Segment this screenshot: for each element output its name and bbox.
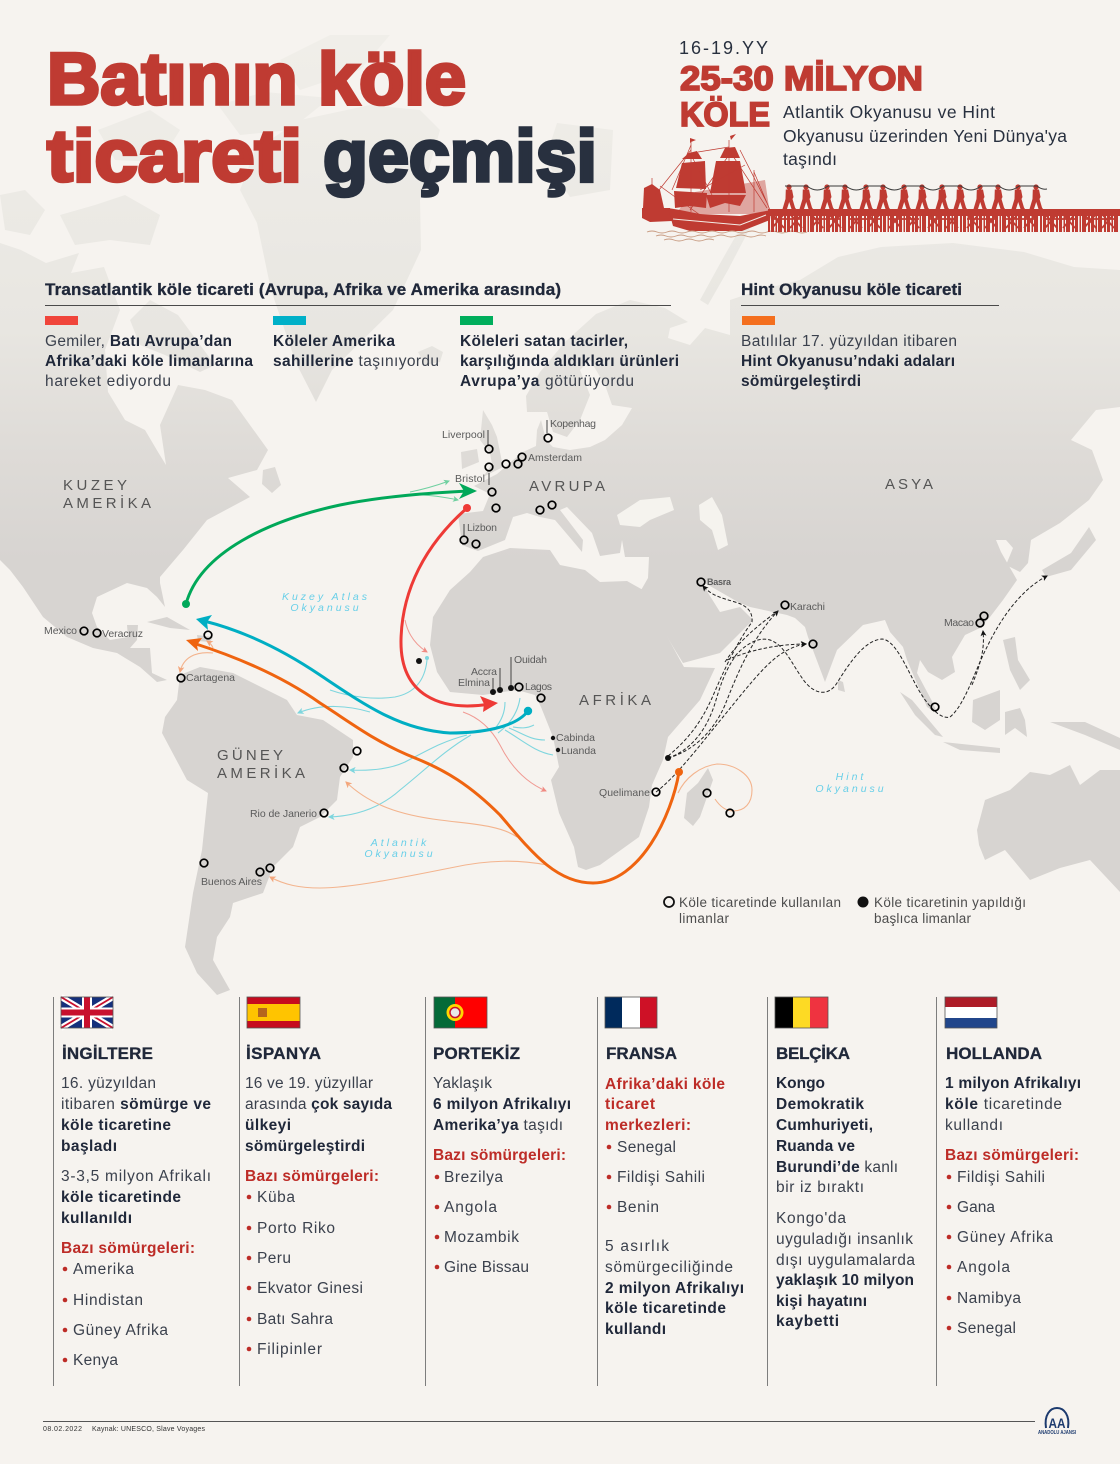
logo: Anadolu Ajansı: AA <box>1048 1415 1066 1431</box>
panel: England: 3-3,5 milyon Afrikalı <box>61 1168 211 1185</box>
panel: Belgium: Kongo'da <box>776 1210 846 1227</box>
route: teal Africa to Americas <box>196 615 532 733</box>
column dividers <box>53 997 937 1386</box>
panel: Netherlands <box>945 997 1081 1337</box>
port names: Amsterdam <box>528 452 582 464</box>
panel: England: başladı <box>61 1138 117 1155</box>
panel: Netherlands: Gana <box>957 1199 995 1216</box>
port names: Lizbon <box>467 522 497 534</box>
thin pink routes <box>405 620 546 791</box>
panel: Netherlands: kullandı <box>945 1117 1003 1134</box>
summary: enslaved people count <box>679 38 1067 169</box>
panel: England: Amerika <box>73 1261 134 1278</box>
panel: Netherlands: Fildişi Sahili <box>957 1169 1045 1186</box>
illustration: sea waves <box>647 231 807 241</box>
continent labels: AFRİKA <box>579 691 651 709</box>
section heading: transatlantic trade: Transatlantik köle ticareti (Avrupa, Afrika ve Amerika arasında) <box>45 280 561 299</box>
logo: Anadolu Ajansı: ANADOLU AJANSI <box>1038 1430 1077 1436</box>
illustration: slave ship <box>642 134 771 231</box>
panel: England: köle ticaretinde <box>61 1189 181 1206</box>
panel: France: Benin <box>617 1199 659 1216</box>
flag: Spain <box>247 997 300 1028</box>
summary: enslaved people count: KÖLE <box>680 96 770 134</box>
title: geçmişi <box>323 116 597 197</box>
panel: Netherlands: köle ticaretinde <box>945 1096 1062 1113</box>
panel: Spain: sömürgeleştirdi <box>245 1138 365 1155</box>
flag: France <box>605 997 657 1028</box>
title: ticareti <box>47 116 302 197</box>
panel: Spain <box>245 997 392 1358</box>
panel: Spain: Porto Riko <box>257 1220 335 1237</box>
panel: Netherlands: Angola <box>957 1259 1010 1276</box>
port names: Veracruz <box>102 628 143 640</box>
title: Batının köle <box>47 39 466 120</box>
panel: Spain: Peru <box>257 1250 291 1267</box>
port names: Mexico <box>44 625 77 637</box>
panel: France: Afrika’daki köle <box>605 1076 725 1093</box>
main port markers <box>416 658 671 761</box>
panel: Netherlands: Güney Afrika <box>957 1229 1053 1246</box>
legend: green route <box>460 316 679 390</box>
panel: France: Senegal <box>617 1139 676 1156</box>
map legend <box>664 895 1026 926</box>
thin orange routes <box>180 641 752 888</box>
panel: Belgium: Demokratik <box>776 1096 864 1113</box>
panel: England: kullanıldı <box>61 1210 132 1227</box>
summary: enslaved people count: 16-19.YY <box>679 38 768 58</box>
panel: France: sömürgeciliğinde <box>605 1259 733 1276</box>
panel: Spain: Batı Sahra <box>257 1311 333 1328</box>
panel: Portugal: Mozambik <box>444 1229 519 1246</box>
legend: orange route <box>741 316 957 390</box>
continent labels <box>63 476 933 782</box>
panel: Belgium: kişi hayatını <box>776 1293 867 1310</box>
map legend: Köle ticaretinde kullanılan <box>679 895 841 910</box>
panel: Belgium: yaklaşık 10 milyon <box>776 1272 914 1289</box>
panel: England: 16. yüzyıldan <box>61 1075 156 1092</box>
legend: green route: Avrupa’ya götürüyordu <box>460 373 634 390</box>
panel: Netherlands: Namibya <box>957 1290 1021 1307</box>
panel: Netherlands: Senegal <box>957 1320 1016 1337</box>
port names: Buenos Aires <box>201 876 262 888</box>
continent labels: ASYA <box>885 476 933 493</box>
thin teal routes <box>298 656 553 817</box>
panel: Portugal: PORTEKİZ <box>433 1044 520 1063</box>
panel: Netherlands: HOLLANDA <box>946 1044 1042 1063</box>
legend: orange route: Hint Okyanusu’ndaki adaları <box>741 353 955 370</box>
port names: Ouidah <box>514 654 547 666</box>
summary: enslaved people count: 25-30 MİLYON <box>680 60 923 98</box>
legend: green route: Köleleri satan tacirler, <box>460 333 628 350</box>
panel: England: İNGİLTERE <box>62 1044 153 1063</box>
panel: Spain: Küba <box>257 1189 295 1206</box>
ocean labels: Okyanusu <box>815 783 887 795</box>
panel: France: 2 milyon Afrikalıyı <box>605 1280 744 1297</box>
panel: Spain: ülkeyi <box>245 1117 291 1134</box>
port label leader lines <box>464 420 547 690</box>
panel: England: Bazı sömürgeleri: <box>61 1240 195 1257</box>
port names: Rio de Janerio <box>250 808 317 820</box>
ocean labels: Okyanusu <box>364 848 436 860</box>
summary: enslaved people count: Atlantik Okyanusu ve Hint <box>783 102 995 122</box>
panel: France: FRANSA <box>606 1044 677 1063</box>
panel: Portugal: Brezilya <box>444 1169 503 1186</box>
panel: Spain: arasında çok sayıda <box>245 1096 392 1113</box>
panel: Belgium: Burundi’de kanlı <box>776 1159 898 1176</box>
legend: teal route <box>273 316 439 370</box>
continent labels: AVRUPA <box>529 478 605 495</box>
ocean labels: Atlantik <box>370 837 429 849</box>
panel: Spain: Ekvator Ginesi <box>257 1280 363 1297</box>
panel: Belgium: BELÇİKA <box>776 1044 850 1063</box>
inland seas <box>617 497 728 550</box>
panel: Spain: İSPANYA <box>246 1044 321 1063</box>
panel: Netherlands: Bazı sömürgeleri: <box>945 1147 1079 1164</box>
continent labels: GÜNEY <box>217 746 283 764</box>
section heading: Indian Ocean trade: Hint Okyanusu köle ticareti <box>741 280 962 299</box>
legend: teal route: Köleler Amerika <box>273 333 395 350</box>
ocean labels: Okyanusu <box>290 602 362 614</box>
port names: Basra <box>707 577 732 587</box>
panel: England: Hindistan <box>73 1292 143 1309</box>
port names: Macao <box>944 617 974 629</box>
route: orange Indian Ocean to Caribbean <box>186 638 683 883</box>
continent labels: KUZEY <box>63 477 127 494</box>
panel: France: merkezleri: <box>605 1117 691 1134</box>
map legend: Köle ticaretinin yapıldığı <box>874 895 1026 910</box>
port names: Luanda <box>561 745 596 757</box>
port names: Cabinda <box>556 732 595 744</box>
panel: Netherlands: 1 milyon Afrikalıyı <box>945 1075 1081 1092</box>
panel: Portugal: Amerika’ya taşıdı <box>433 1117 563 1134</box>
ocean labels <box>282 591 887 860</box>
port names: Karachi <box>790 601 825 613</box>
legend: orange route: sömürgeleştirdi <box>741 373 861 390</box>
flag: Portugal <box>434 997 487 1028</box>
panel: France: ticaret <box>605 1096 655 1113</box>
panel: Portugal <box>433 997 571 1276</box>
port names: Accra <box>471 666 497 678</box>
panel: Portugal: Gine Bissau <box>444 1259 529 1276</box>
panel: Belgium: Ruanda ve <box>776 1138 855 1155</box>
panel: Portugal: Yaklaşık <box>433 1075 492 1092</box>
panel: Spain: Bazı sömürgeleri: <box>245 1168 379 1185</box>
panel: England: Güney Afrika <box>73 1322 168 1339</box>
route: red Europe to Africa <box>401 504 498 712</box>
summary: enslaved people count: taşındı <box>783 149 837 169</box>
panel: Portugal: Angola <box>444 1199 497 1216</box>
panel: France: Fildişi Sahili <box>617 1169 705 1186</box>
continent labels: AMERİKA <box>217 764 305 782</box>
summary: enslaved people count: Okyanusu üzerinden Yeni Dünya'ya <box>783 126 1067 146</box>
illustration: chained enslaved people <box>782 184 1047 209</box>
panel: France: 5 asırlık <box>605 1238 669 1255</box>
port names: Elmina <box>458 677 490 689</box>
panel: France <box>605 997 744 1338</box>
port names: Quelimane <box>599 787 650 799</box>
panel: Belgium: Cumhuriyeti, <box>776 1117 873 1134</box>
panel: Spain: Filipinler <box>257 1341 322 1358</box>
panel: Belgium: uyguladığı insanlık <box>776 1231 913 1248</box>
panel: Belgium: bir iz bıraktı <box>776 1179 864 1196</box>
flag: Belgium <box>775 997 828 1028</box>
panel: England: köle ticaretine <box>61 1117 171 1134</box>
legend: green route: karşılığında aldıkları ürünleri <box>460 353 679 370</box>
legend: red route <box>45 316 253 390</box>
flag: Netherlands <box>945 997 997 1028</box>
footer: date and source: Kaynak: UNESCO, Slave Voyages <box>92 1426 206 1433</box>
port names: Lagos <box>525 681 552 693</box>
panel: England: Kenya <box>73 1352 118 1369</box>
ocean labels: Kuzey Atlas <box>282 591 370 603</box>
panel: Portugal: Bazı sömürgeleri: <box>433 1147 566 1164</box>
legend: red route: hareket ediyordu <box>45 373 171 390</box>
legend: teal route: sahillerine taşınıyordu <box>273 353 439 370</box>
world map <box>0 35 1120 995</box>
dashed Indian Ocean routes <box>656 576 1047 792</box>
map legend: limanlar <box>679 911 730 926</box>
panel: Belgium: Kongo <box>776 1075 825 1092</box>
port names: Kopenhag <box>550 418 596 430</box>
flag: United Kingdom <box>61 997 113 1028</box>
panel: Portugal: 6 milyon Afrikalıyı <box>433 1096 571 1113</box>
panel: Spain: 16 ve 19. yüzyıllar <box>245 1075 373 1092</box>
footer: date and source: 08.02.2022 <box>43 1426 82 1433</box>
panel: Belgium: kaybetti <box>776 1313 839 1330</box>
footer: date and source <box>43 1421 1035 1433</box>
panel: France: köle ticaretinde <box>605 1300 726 1317</box>
port names: Bristol <box>455 473 485 485</box>
route: green Americas to Europe <box>182 483 477 608</box>
logo: Anadolu Ajansı <box>1038 1408 1077 1436</box>
panel: Belgium <box>775 997 915 1330</box>
port names: Cartagena <box>186 672 235 684</box>
ocean labels: Hint <box>836 771 866 783</box>
legend: orange route: Batılılar 17. yüzyıldan itibaren <box>741 333 957 350</box>
map legend: başlıca limanlar <box>874 911 972 926</box>
legend: red route: Gemiler, Batı Avrupa’dan <box>45 333 232 350</box>
panel: France: kullandı <box>605 1321 666 1338</box>
title <box>47 39 597 197</box>
legend: red route: Afrika’daki köle limanlarına <box>45 353 253 370</box>
port names: Liverpool <box>442 429 485 441</box>
panel: England: itibaren sömürge ve <box>61 1096 211 1113</box>
illustration: pier <box>768 209 1120 232</box>
thin green routes <box>410 481 458 500</box>
open port markers <box>80 434 988 876</box>
port names <box>44 418 974 888</box>
panel: England <box>61 997 211 1369</box>
continent labels: AMERİKA <box>63 494 151 512</box>
panel: Belgium: dışı uygulamalarda <box>776 1252 915 1269</box>
